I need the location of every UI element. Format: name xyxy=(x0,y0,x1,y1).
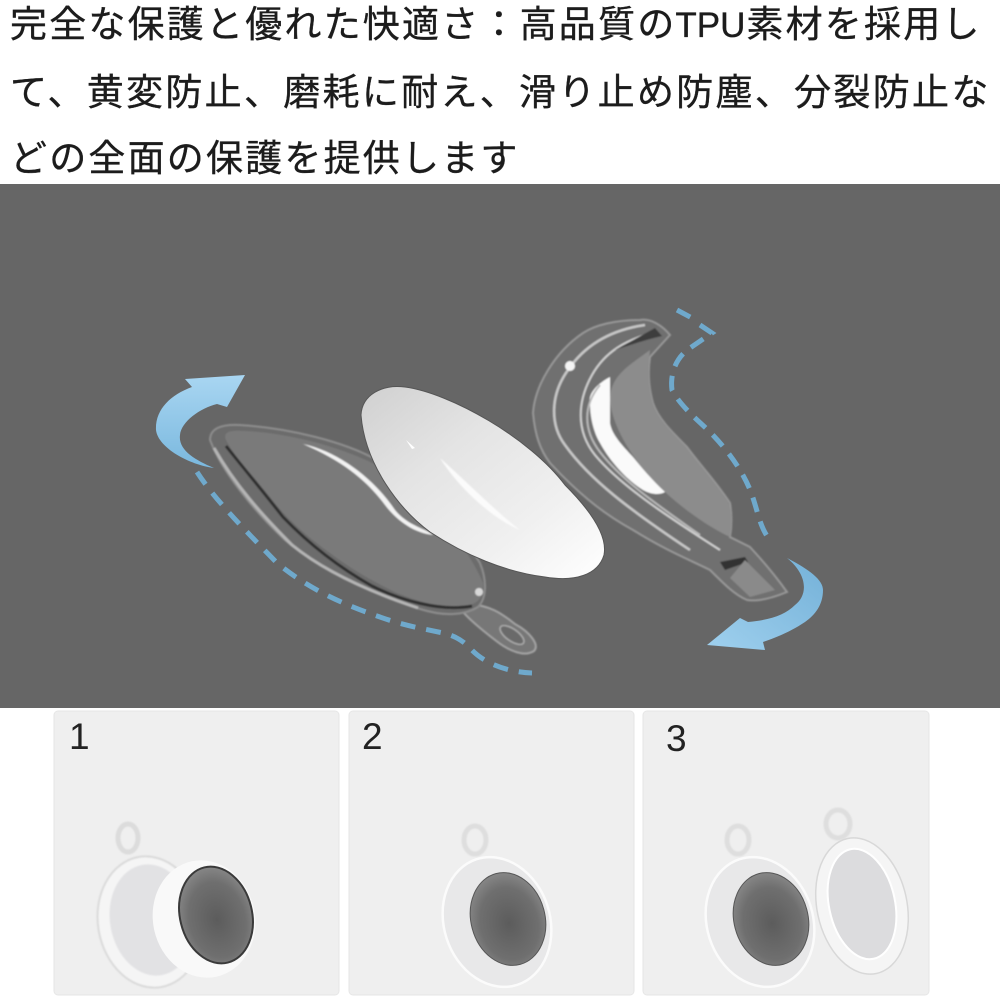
cover inner surface xyxy=(818,842,906,966)
case rim xyxy=(210,425,485,614)
panel: step 3 card xyxy=(643,711,929,1000)
heading line 2: て、黄変防止、磨耗に耐え、滑り止め防塵、分裂防止な xyxy=(10,72,991,113)
heading line 1: 完全な保護と優れた快適さ：高品質のTPU素材を採用し xyxy=(10,4,982,45)
bright highlight xyxy=(590,377,665,494)
arrow: curved blue arrow upper left xyxy=(156,375,245,468)
rim lines xyxy=(554,325,690,550)
clear case left xyxy=(210,425,536,654)
open cover ring xyxy=(826,810,850,838)
panel: dark gray product view xyxy=(0,184,1000,708)
clear case body xyxy=(426,843,568,1000)
open cover xyxy=(804,829,920,983)
number 2: 2 xyxy=(362,716,383,757)
heading text block xyxy=(10,4,991,179)
clear case ring xyxy=(464,826,486,854)
heading line 3: どの全面の保護を提供します xyxy=(10,138,520,179)
case ring xyxy=(727,826,749,854)
inner translucent fill xyxy=(610,350,731,537)
case body xyxy=(533,320,787,600)
clear case right side view xyxy=(533,320,787,600)
tracker disc xyxy=(723,864,819,974)
case dark rim line xyxy=(226,446,472,608)
panel: step 2 card xyxy=(349,711,634,1000)
case body xyxy=(689,843,831,1000)
clear case with ring xyxy=(87,824,213,996)
arrow: curved blue arrow lower right xyxy=(707,558,823,650)
white cover and tracker disc xyxy=(142,851,266,987)
case inner surface xyxy=(225,431,483,607)
case tab with ring xyxy=(463,604,536,654)
dashed guide line left xyxy=(197,472,532,673)
number 1: 1 xyxy=(69,716,90,757)
number 3: 3 xyxy=(666,718,687,759)
tracker disc xyxy=(460,864,556,974)
white device disc xyxy=(361,387,605,579)
panel: step 1 card xyxy=(54,711,339,996)
case highlight xyxy=(303,444,433,535)
dashed guide line right xyxy=(672,310,770,540)
